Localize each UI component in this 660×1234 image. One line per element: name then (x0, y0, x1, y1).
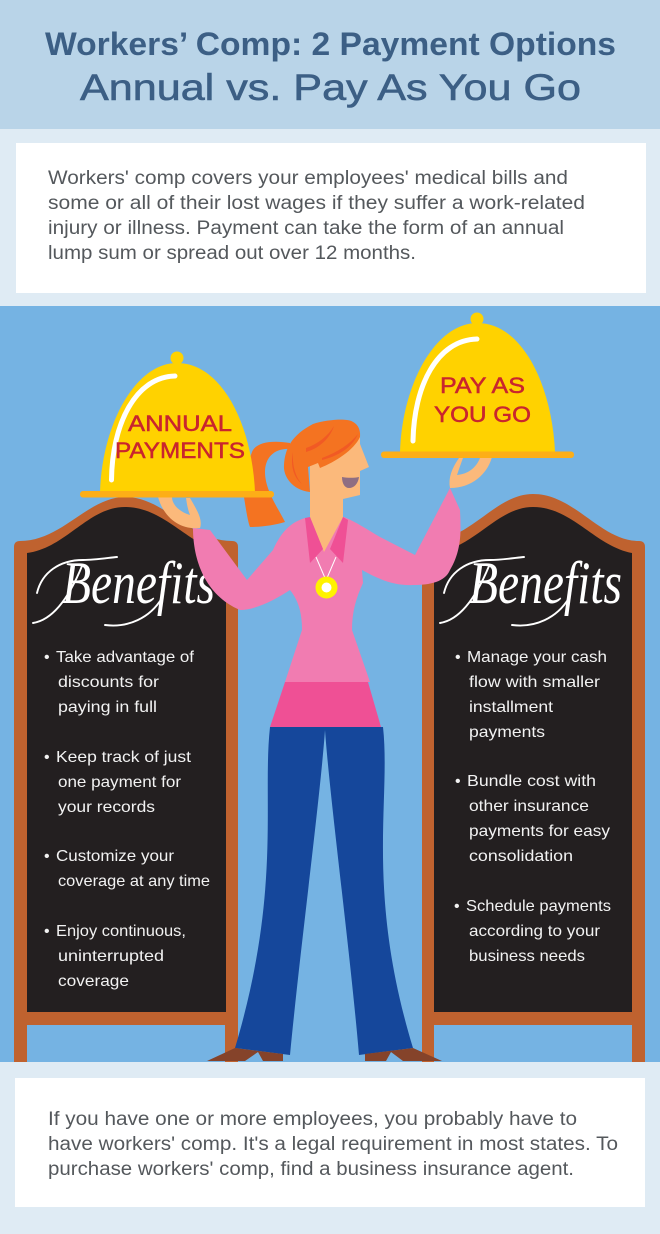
panel: introduction text: some or all of their lost wages if they suffer a work-related (48, 193, 585, 214)
icon: right serving cloche, pay as you go: YOU GO (434, 402, 531, 427)
panel: closing text: If you have one or more employees, you probably have to (48, 1109, 577, 1130)
panel: left chalkboard, annual benefits: your records (58, 799, 155, 816)
panel: right chalkboard, pay as you go benefits: business needs (469, 948, 585, 965)
panel: introduction text (16, 143, 646, 293)
panel: left chalkboard, annual benefits: discounts for (58, 674, 160, 691)
panel: left chalkboard, annual benefits: Enjoy continuous, (56, 923, 186, 940)
panel: closing text: have workers' comp. It's a legal requirement in most states. To (48, 1134, 618, 1155)
panel: right chalkboard, pay as you go benefits: payments for easy (469, 823, 610, 840)
panel: left chalkboard, annual benefits: • (44, 749, 50, 766)
shoes (207, 1048, 442, 1061)
panel: right chalkboard, pay as you go benefits: • (455, 773, 461, 790)
panel: right chalkboard, pay as you go benefits: payments (469, 724, 545, 741)
necklace pendant (316, 557, 338, 598)
panel: closing text: purchase workers' comp, find a business insurance agent. (48, 1159, 574, 1180)
panel: left chalkboard, annual benefits (14, 497, 238, 1062)
panel: right chalkboard, pay as you go benefits: installment (469, 699, 554, 716)
pants (235, 727, 413, 1055)
panel: left chalkboard, annual benefits: coverage at any time (58, 873, 210, 890)
pink blouse and sleeves (193, 488, 461, 682)
panel: right chalkboard, pay as you go benefits: • (455, 649, 461, 666)
panel: right chalkboard, pay as you go benefits: • (454, 898, 460, 915)
panel: left chalkboard, annual benefits: one payment for (58, 774, 182, 791)
panel: right chalkboard, pay as you go benefits: according to your (469, 923, 601, 940)
panel: left chalkboard, annual benefits: coverage (58, 973, 129, 990)
panel: left chalkboard, annual benefits: Customize your (56, 848, 175, 865)
hair (284, 420, 360, 492)
collar (305, 517, 348, 563)
panel: left chalkboard, annual benefits: uninterrupted (58, 948, 164, 965)
panel: right chalkboard, pay as you go benefits: Bundle cost with (467, 773, 596, 790)
panel: blue illustration background (0, 306, 660, 1062)
panel: left chalkboard, annual benefits: Benefits (62, 550, 215, 616)
panel: introduction text: lump sum or spread out over 12 months. (48, 243, 416, 264)
panel: left chalkboard, annual benefits: paying in full (58, 699, 157, 716)
icon: right serving cloche, pay as you go: PAY AS (440, 373, 525, 398)
woman waiter illustration (158, 420, 492, 1061)
panel: left chalkboard, annual benefits: • (44, 923, 50, 940)
icon: left serving cloche, annual payments: PAYMENTS (115, 438, 245, 463)
panel: right chalkboard, pay as you go benefits: consolidation (469, 848, 573, 865)
left hand (158, 497, 201, 528)
icon: left serving cloche, annual payments (80, 352, 274, 498)
panel: right chalkboard, pay as you go benefits: Benefits (469, 550, 622, 616)
panel: closing text (15, 1078, 645, 1207)
header band with title (0, 0, 660, 129)
panel: right chalkboard, pay as you go benefits: other insurance (469, 798, 589, 815)
panel: right chalkboard, pay as you go benefits: flow with smaller (469, 674, 601, 691)
panel: left chalkboard, annual benefits: Take advantage of (56, 649, 195, 666)
panel: left chalkboard, annual benefits: • (44, 649, 50, 666)
panel: right chalkboard, pay as you go benefits: Manage your cash (467, 649, 607, 666)
neck and face (310, 432, 369, 552)
panel: introduction text: injury or illness. Payment can take the form of an annual (48, 218, 564, 239)
panel: left chalkboard, annual benefits: • (44, 848, 50, 865)
mouth (342, 477, 359, 488)
ponytail (244, 442, 290, 527)
panel: left chalkboard, annual benefits: Keep track of just (56, 749, 192, 766)
header band with title: Annual vs. Pay As You Go (80, 67, 581, 108)
panel: right chalkboard, pay as you go benefits (422, 494, 645, 1062)
icon: right serving cloche, pay as you go (381, 312, 574, 458)
icon: left serving cloche, annual payments: ANNUAL (128, 411, 232, 436)
panel: introduction text: Workers' comp covers your employees' medical bills and (48, 168, 568, 189)
panel: right chalkboard, pay as you go benefits: Schedule payments (466, 898, 611, 915)
right hand (449, 458, 492, 488)
header band with title: Workers’ Comp: 2 Payment Options (45, 26, 616, 62)
waist sash (270, 682, 381, 727)
